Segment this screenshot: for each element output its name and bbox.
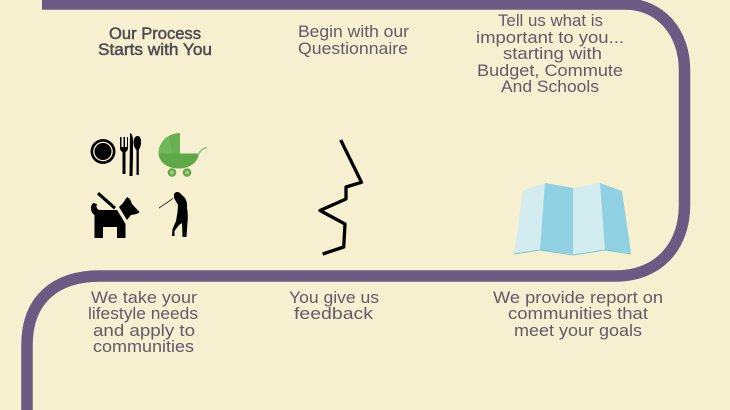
heading: our process starts with you: Starts with You — [98, 40, 212, 59]
text: tell us what is important: Budget, Commute — [477, 61, 623, 80]
text: we take your lifestyle needs: and apply to — [93, 321, 195, 340]
text: we provide report: meet your goals — [514, 321, 642, 340]
text: we provide report: We provide report on — [493, 288, 663, 307]
heading: our process starts with you: Our Process — [109, 24, 201, 43]
text: begin with our questionnaire — [298, 22, 409, 58]
icon: green baby carriage — [158, 133, 207, 176]
text: tell us what is important — [476, 11, 624, 96]
icon: folded map — [514, 183, 631, 255]
text: you give us feedback: You give us — [289, 288, 379, 307]
text: tell us what is important: starting with — [503, 44, 602, 63]
icon: feedback zigzag line — [320, 140, 362, 254]
text: we provide report — [493, 288, 663, 340]
text: we take your lifestyle needs: lifestyle needs — [88, 304, 198, 323]
text: begin with our questionnaire: Begin with our — [298, 22, 409, 41]
text: you give us feedback — [289, 288, 379, 323]
text: begin with our questionnaire: Questionnaire — [298, 39, 408, 58]
icon: dog on leash — [91, 192, 140, 238]
icon: plate and cutlery — [90, 133, 141, 176]
icon: golfer — [159, 192, 188, 237]
text: tell us what is important: And Schools — [501, 77, 599, 96]
text: we take your lifestyle needs: We take your — [91, 288, 197, 307]
heading: our process starts with you — [98, 24, 212, 59]
text: we provide report: communities that — [508, 304, 648, 323]
text: we take your lifestyle needs: communities — [93, 337, 194, 356]
text: you give us feedback: feedback — [294, 304, 374, 323]
text: we take your lifestyle needs — [88, 288, 198, 356]
text: tell us what is important: important to you... — [476, 28, 624, 47]
text: tell us what is important: Tell us what is — [498, 11, 603, 30]
